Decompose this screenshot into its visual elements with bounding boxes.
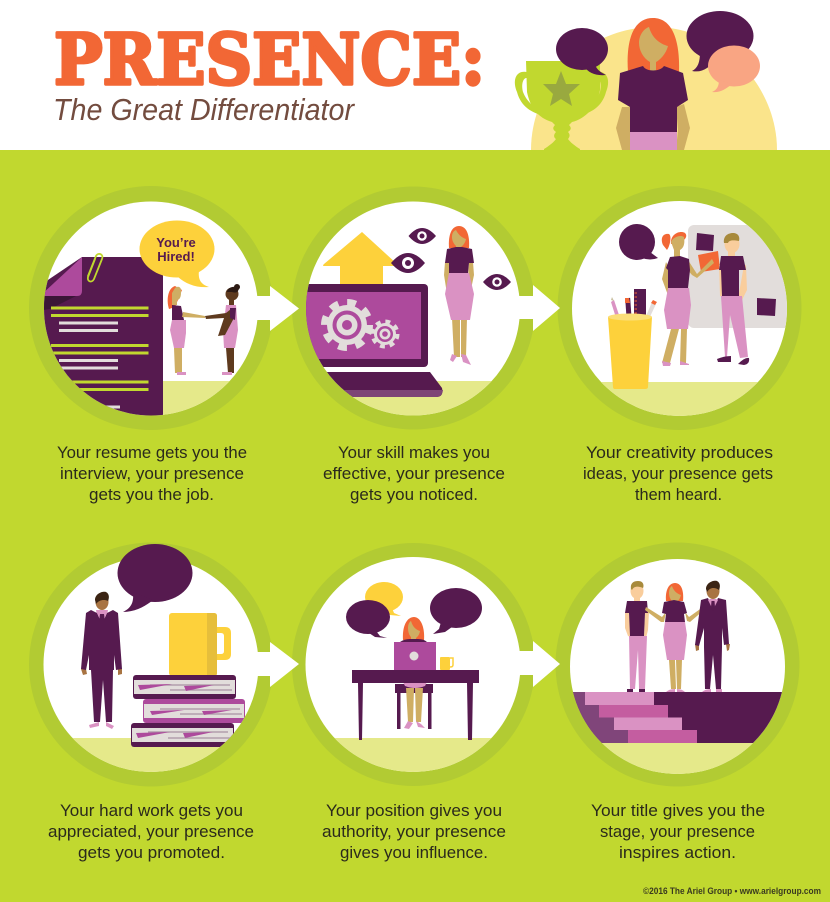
speech bubble: purple left — [346, 600, 390, 638]
sticky notes — [696, 233, 776, 316]
man in suit — [81, 592, 122, 729]
small gear — [372, 322, 398, 346]
laptop — [295, 284, 443, 397]
desk — [352, 670, 479, 740]
arrow: position to title — [512, 641, 560, 687]
panel: resume scene — [44, 202, 258, 416]
stage — [573, 692, 782, 743]
speech bubble: You're Hired: Hired! — [157, 249, 195, 264]
woman at desk — [400, 617, 427, 729]
pencils and ruler — [611, 289, 657, 316]
caption: title: stage, your presence — [600, 823, 755, 841]
eye 2 — [391, 253, 425, 273]
caption: position: gives you influence. — [340, 844, 488, 862]
pencil cup — [608, 314, 652, 389]
caption: resume: interview, your presence — [60, 465, 244, 483]
panel: title scene — [570, 559, 785, 774]
speech bubble: You're Hired — [140, 220, 214, 287]
speech bubble: salmon — [708, 46, 760, 92]
caption: skill: gets you noticed. — [350, 486, 478, 504]
caption: hard work: gets you promoted. — [78, 844, 225, 862]
caption: position — [322, 802, 506, 862]
chair — [395, 684, 433, 729]
yellow dome backdrop — [531, 27, 777, 150]
book 3 — [131, 723, 234, 747]
woman pointing — [662, 232, 714, 366]
trophy — [515, 61, 608, 150]
caption: skill: Your skill makes you — [338, 444, 490, 462]
whiteboard — [688, 225, 787, 328]
large gear — [324, 302, 370, 348]
skirt — [404, 683, 426, 688]
woman — [616, 18, 690, 150]
arrow: resume to skill — [250, 286, 299, 331]
speech bubble: large — [118, 544, 192, 612]
woman shaking hands — [168, 286, 205, 375]
subtitle: The Great Differentiator — [53, 92, 356, 127]
panel: creativity scene — [572, 201, 787, 416]
paperclip — [88, 254, 102, 281]
title: PRESENCE: — [54, 18, 485, 101]
caption: resume: gets you the job. — [89, 486, 214, 504]
speech bubble: purple right — [686, 11, 754, 71]
caption: hard work — [48, 802, 254, 862]
speech bubble: left — [556, 28, 608, 75]
caption: creativity: them heard. — [635, 486, 722, 504]
small mug — [440, 657, 453, 670]
speech bubble: You're Hired: You’re — [156, 235, 196, 250]
caption: skill: effective, your presence — [323, 465, 505, 483]
panel: skill scene — [306, 202, 520, 416]
caption: title — [591, 802, 765, 862]
rings — [29, 186, 802, 786]
eye 3 — [483, 274, 511, 290]
book 1 — [133, 675, 236, 699]
laptop — [394, 642, 436, 670]
speech bubble: purple right — [430, 588, 482, 634]
caption: position: authority, your presence — [322, 823, 506, 841]
caption: skill — [323, 444, 505, 504]
woman — [645, 583, 704, 692]
man in t-shirt — [625, 581, 649, 692]
caption: resume: Your resume gets you the — [57, 444, 247, 462]
speech bubble — [619, 224, 658, 260]
caption: title: Your title gives you the — [591, 802, 765, 820]
standing woman — [444, 226, 474, 365]
caption: resume — [57, 444, 247, 504]
woman with dark skin — [205, 284, 240, 375]
coffee mug — [169, 613, 231, 676]
panel: position scene — [306, 557, 520, 772]
man in suit — [695, 581, 730, 692]
panel: hard work scene — [44, 544, 258, 772]
eye 1 — [408, 228, 436, 244]
book 2 — [143, 699, 245, 723]
caption: title: inspires action. — [619, 844, 736, 862]
caption: hard work: appreciated, your presence — [48, 823, 254, 841]
resume document — [44, 257, 163, 416]
caption: creativity: ideas, your presence gets — [583, 465, 773, 483]
up arrow — [323, 232, 394, 284]
caption: creativity — [583, 444, 773, 504]
caption: position: Your position gives you — [326, 802, 502, 820]
caption: hard work: Your hard work gets you — [60, 802, 243, 820]
arrow: skill to creativity — [512, 285, 560, 331]
arrow: hard work to position — [250, 642, 299, 687]
caption: creativity: Your creativity produces — [586, 444, 773, 462]
header illustration — [515, 11, 777, 150]
man — [717, 233, 749, 365]
speech bubble: yellow — [365, 582, 403, 616]
